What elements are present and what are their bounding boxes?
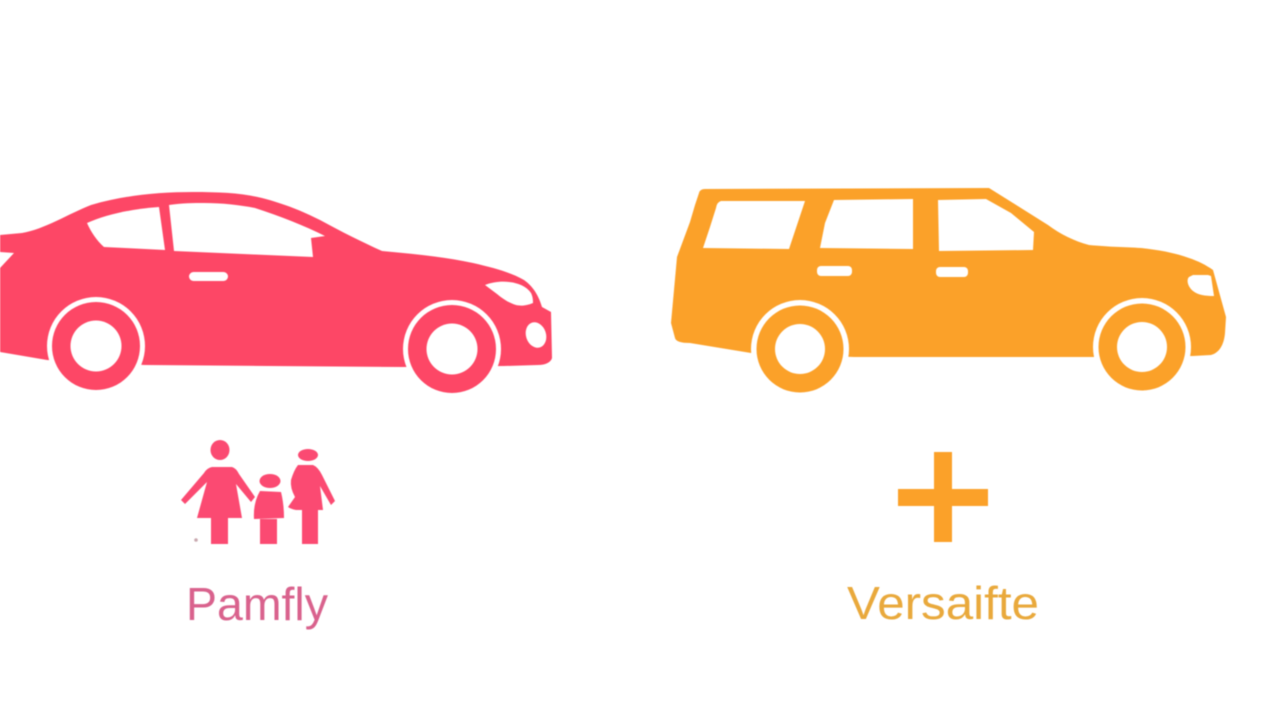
- label: Versaifte: Versaifte: [847, 577, 1039, 629]
- icon: family: [181, 440, 335, 544]
- panel: family sedan: [0, 192, 552, 630]
- label: Pamfly: Pamfly: [186, 578, 328, 630]
- panel: versatile SUV: [671, 188, 1226, 629]
- icon: plus: [898, 452, 988, 542]
- icon: orange SUV: [671, 188, 1226, 398]
- icon: red sedan: [0, 192, 552, 398]
